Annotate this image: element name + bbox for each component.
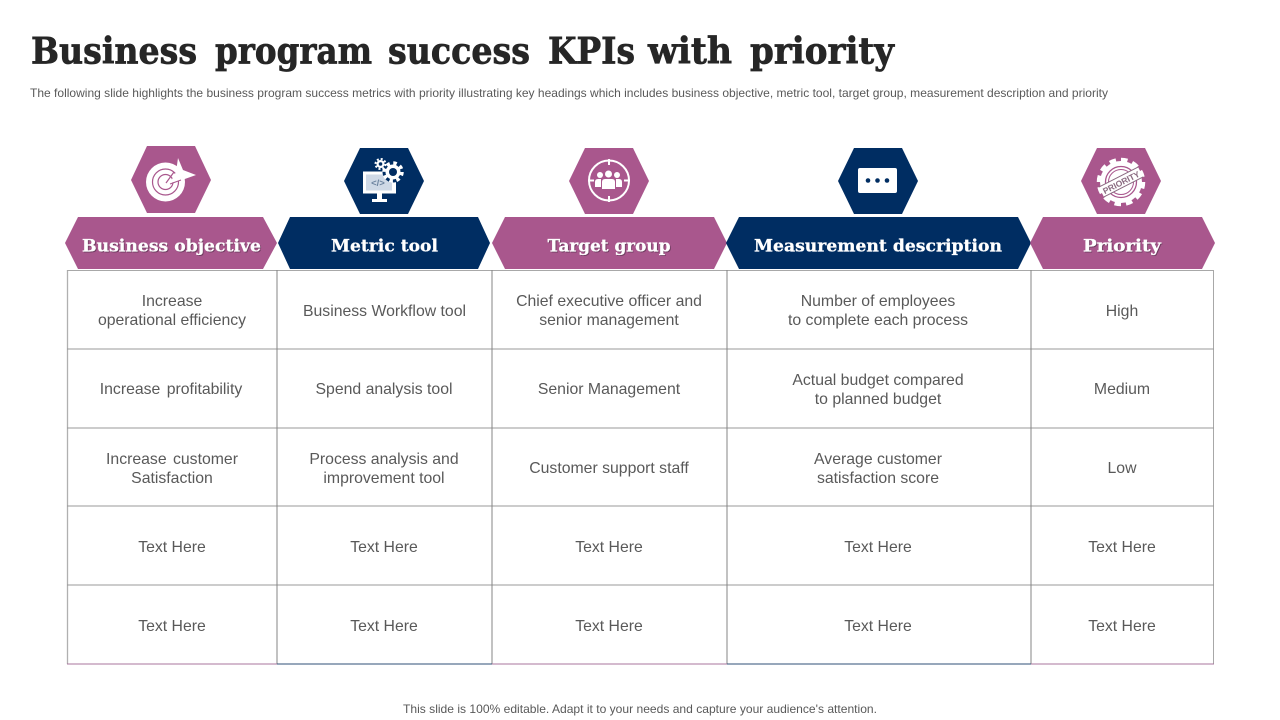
table row 5 [138, 618, 1156, 635]
table grid [67, 270, 1214, 664]
icon: monitor with gears: </> [371, 178, 385, 189]
table row 2 [100, 372, 1150, 408]
icon: speech box with dots [838, 148, 918, 214]
table row 5: Text Here [1088, 618, 1156, 635]
table row 4: Text Here [844, 539, 912, 556]
table row 3: Increase customer [106, 451, 238, 468]
table row 3: Process analysis and [309, 451, 459, 468]
table row 2: Medium [1094, 381, 1150, 398]
title: success [388, 30, 530, 72]
table row 2: Spend analysis tool [316, 381, 452, 398]
title: priority [750, 30, 895, 72]
table row 3: Low [1108, 460, 1137, 477]
footer note: This slide is 100% editable. Adapt it to your needs and capture your audience's attention. [403, 702, 877, 716]
title: program [215, 30, 372, 72]
table row 2: Increase profitability [100, 381, 242, 398]
column header: Target group: Target group [548, 236, 671, 256]
icon: monitor with gears [344, 148, 424, 214]
table row 1: High [1106, 303, 1138, 320]
column header: Priority [1030, 217, 1215, 269]
subtitle: The following slide highlights the business program success metrics with priority illustrating key headings which includes business objective, metric tool, target group, measurement description and priority [30, 86, 1108, 100]
icon: priority stamp [1081, 148, 1161, 214]
table row 4 [138, 539, 1156, 556]
table row 5: Text Here [844, 618, 912, 635]
table row 2: Senior Management [538, 381, 681, 398]
table row 4: Text Here [350, 539, 418, 556]
table row 5: Text Here [350, 618, 418, 635]
column header: Metric tool: Metric tool [331, 236, 439, 256]
column header: Measurement description [726, 217, 1031, 269]
icon: team in crosshair [569, 148, 649, 214]
table row 1 [98, 293, 1138, 329]
table row 5: Text Here [138, 618, 206, 635]
table row 4: Text Here [138, 539, 206, 556]
column header: Business objective [65, 217, 277, 269]
table row 3 [106, 451, 1137, 487]
column header: Metric tool [278, 217, 490, 269]
column header: Priority: Priority [1083, 236, 1162, 256]
column header: Target group [492, 217, 727, 269]
table row 2: Actual budget compared [792, 372, 964, 389]
table row 2: to planned budget [815, 391, 942, 408]
icon: priority stamp: PRIORITY [1101, 169, 1142, 196]
table row 1: senior management [539, 312, 679, 329]
column header: Measurement description: Measurement description [754, 236, 1002, 256]
table row 1: Business Workflow tool [303, 303, 466, 320]
table row 3: Satisfaction [131, 470, 213, 487]
table row 3: Average customer [814, 451, 942, 468]
table row 5: Text Here [575, 618, 643, 635]
icon: target with arrow [131, 146, 211, 213]
table row 1: Increase [142, 293, 203, 310]
column header: Target group: Target group [548, 238, 672, 258]
column header: Business objective: Business objective [83, 238, 262, 258]
title [31, 30, 895, 72]
column header: Business objective: Business objective [82, 236, 261, 256]
table row 3: Customer support staff [529, 460, 689, 477]
table row 3: satisfaction score [817, 470, 939, 487]
table row 1: Chief executive officer and [516, 293, 702, 310]
column header: Priority: Priority [1084, 238, 1163, 258]
title: with [647, 30, 732, 72]
table row 3: improvement tool [323, 470, 445, 487]
table row 1: Number of employees [801, 293, 955, 310]
title: KPIs [548, 30, 635, 72]
table row 1: operational efficiency [98, 312, 246, 329]
table row 4: Text Here [1088, 539, 1156, 556]
title: Business [31, 30, 197, 72]
table row 4: Text Here [575, 539, 643, 556]
table row 1: to complete each process [788, 312, 968, 329]
